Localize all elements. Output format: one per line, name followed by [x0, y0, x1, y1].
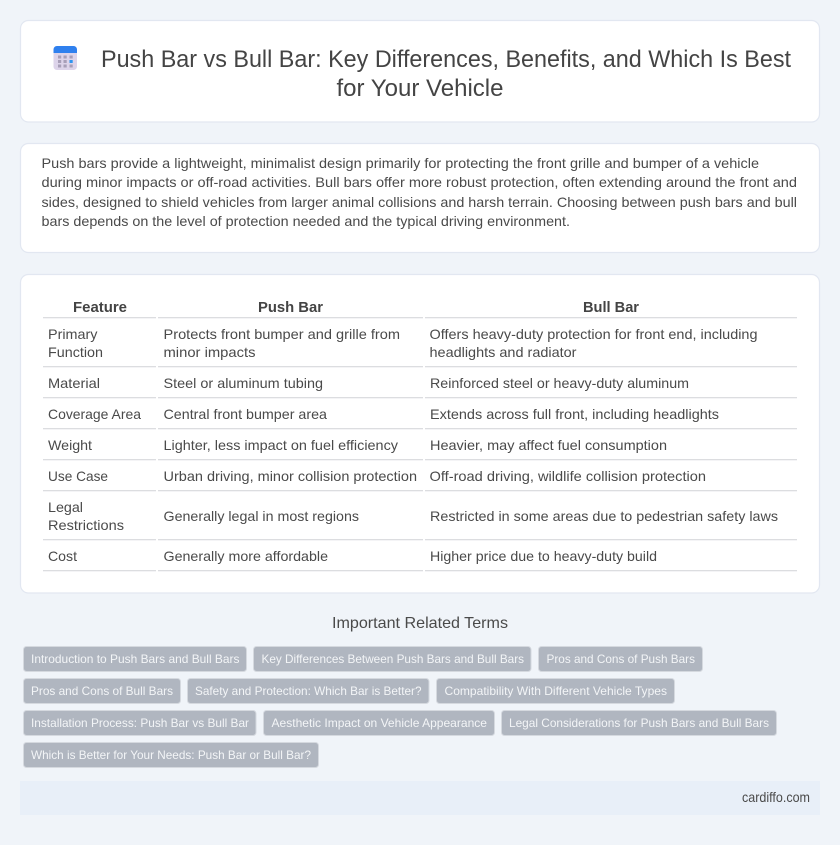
- panel: comparison table: [20, 274, 820, 593]
- row: legal restrictions: Generally legal in most regions: [164, 508, 359, 524]
- tag: [254, 646, 531, 672]
- row: coverage area: Extends across full front, including headlights: [430, 406, 719, 422]
- row: coverage area: [48, 406, 719, 422]
- panel: header: [20, 20, 820, 122]
- row: legal restrictions: Restricted in some areas due to pedestrian safety laws: [430, 508, 778, 524]
- row: material: Reinforced steel or heavy-duty aluminum: [430, 375, 689, 391]
- row: primary function: headlights and radiator: [430, 344, 577, 360]
- tag: Which is Better for Your Needs: Push Bar or Bull Bar?: [31, 748, 311, 762]
- row: primary function: Function: [48, 344, 103, 360]
- row: coverage area: Coverage Area: [48, 406, 141, 422]
- row: use case: Use Case: [48, 468, 108, 484]
- row: legal restrictions: Legal: [48, 499, 83, 515]
- row: material: Steel or aluminum tubing: [164, 375, 323, 391]
- tag: [188, 678, 429, 704]
- heading: important related terms: Important Related Terms: [332, 615, 508, 632]
- row: use case: Urban driving, minor collision protection: [164, 468, 417, 484]
- tag: Compatibility With Different Vehicle Types: [444, 684, 667, 698]
- footer source text: cardiffo.com: [742, 789, 810, 805]
- row: weight: Heavier, may affect fuel consumption: [430, 437, 667, 453]
- tag: [24, 710, 256, 736]
- row: cost: Generally more affordable: [164, 548, 328, 564]
- row: coverage area: Central front bumper area: [164, 406, 327, 422]
- tag: Key Differences Between Push Bars and Bull Bars: [262, 652, 524, 666]
- tag: Aesthetic Impact on Vehicle Appearance: [272, 716, 487, 730]
- tag: Introduction to Push Bars and Bull Bars: [31, 652, 240, 666]
- row: weight: Weight: [48, 437, 92, 453]
- table header: Bull Bar: [583, 299, 639, 316]
- panel: introduction: [20, 144, 820, 252]
- row: primary function: [48, 326, 758, 360]
- intro paragraph: Push bars provide a lightweight, minimalist design primarily for protecting the front grille and bumper of a vehicle: [42, 155, 759, 171]
- tag: [24, 742, 318, 768]
- title: Push Bar vs Bull Bar: Key Differences, Benefits, and Which Is Best: [101, 46, 791, 73]
- row: primary function: minor impacts: [164, 344, 256, 360]
- related terms tags: [24, 646, 776, 768]
- row: primary function: Offers heavy-duty protection for front end, including: [430, 326, 758, 342]
- tag: [24, 646, 246, 672]
- intro paragraph: bars depends on the level of protection needed and the typical driving environment.: [42, 213, 570, 229]
- tag: [24, 678, 180, 704]
- tag: [436, 678, 674, 704]
- table header: Feature: [73, 299, 127, 316]
- tag: Safety and Protection: Which Bar is Better?: [195, 684, 422, 698]
- row: cost: Cost: [48, 548, 77, 564]
- tag: Installation Process: Push Bar vs Bull Bar: [31, 716, 249, 730]
- table header: Push Bar: [258, 299, 323, 316]
- row: primary function: Protects front bumper and grille from: [164, 326, 400, 342]
- intro paragraph: during minor impacts or off-road activities. Bull bars offer more robust protection, often extending around the front and: [42, 174, 797, 190]
- row: primary function: Primary: [48, 326, 98, 342]
- table header: [73, 299, 639, 316]
- title: for Your Vehicle: [336, 75, 504, 102]
- title: [101, 46, 791, 102]
- icon: calendar: [54, 46, 77, 70]
- row: weight: Lighter, less impact on fuel efficiency: [164, 437, 398, 453]
- row: use case: Off-road driving, wildlife collision protection: [430, 468, 706, 484]
- row: material: [48, 375, 689, 391]
- tag: [502, 710, 776, 736]
- intro paragraph: sides, designed to shield vehicles from larger animal collisions and harsh terrain. Choosing between push bars and bull: [42, 194, 797, 210]
- footer bar: [20, 781, 820, 815]
- intro paragraph: [42, 155, 797, 229]
- tag: Legal Considerations for Push Bars and Bull Bars: [509, 716, 769, 730]
- row: legal restrictions: Restrictions: [48, 517, 124, 533]
- tag: [264, 710, 494, 736]
- row: cost: [48, 548, 657, 564]
- tag: Pros and Cons of Bull Bars: [31, 684, 173, 698]
- row: use case: [48, 468, 706, 484]
- row: cost: Higher price due to heavy-duty build: [430, 548, 657, 564]
- row: weight: [48, 437, 667, 453]
- row: material: Material: [48, 375, 100, 391]
- tag: [538, 646, 702, 672]
- tag: Pros and Cons of Push Bars: [546, 652, 695, 666]
- row: legal restrictions: [48, 499, 778, 533]
